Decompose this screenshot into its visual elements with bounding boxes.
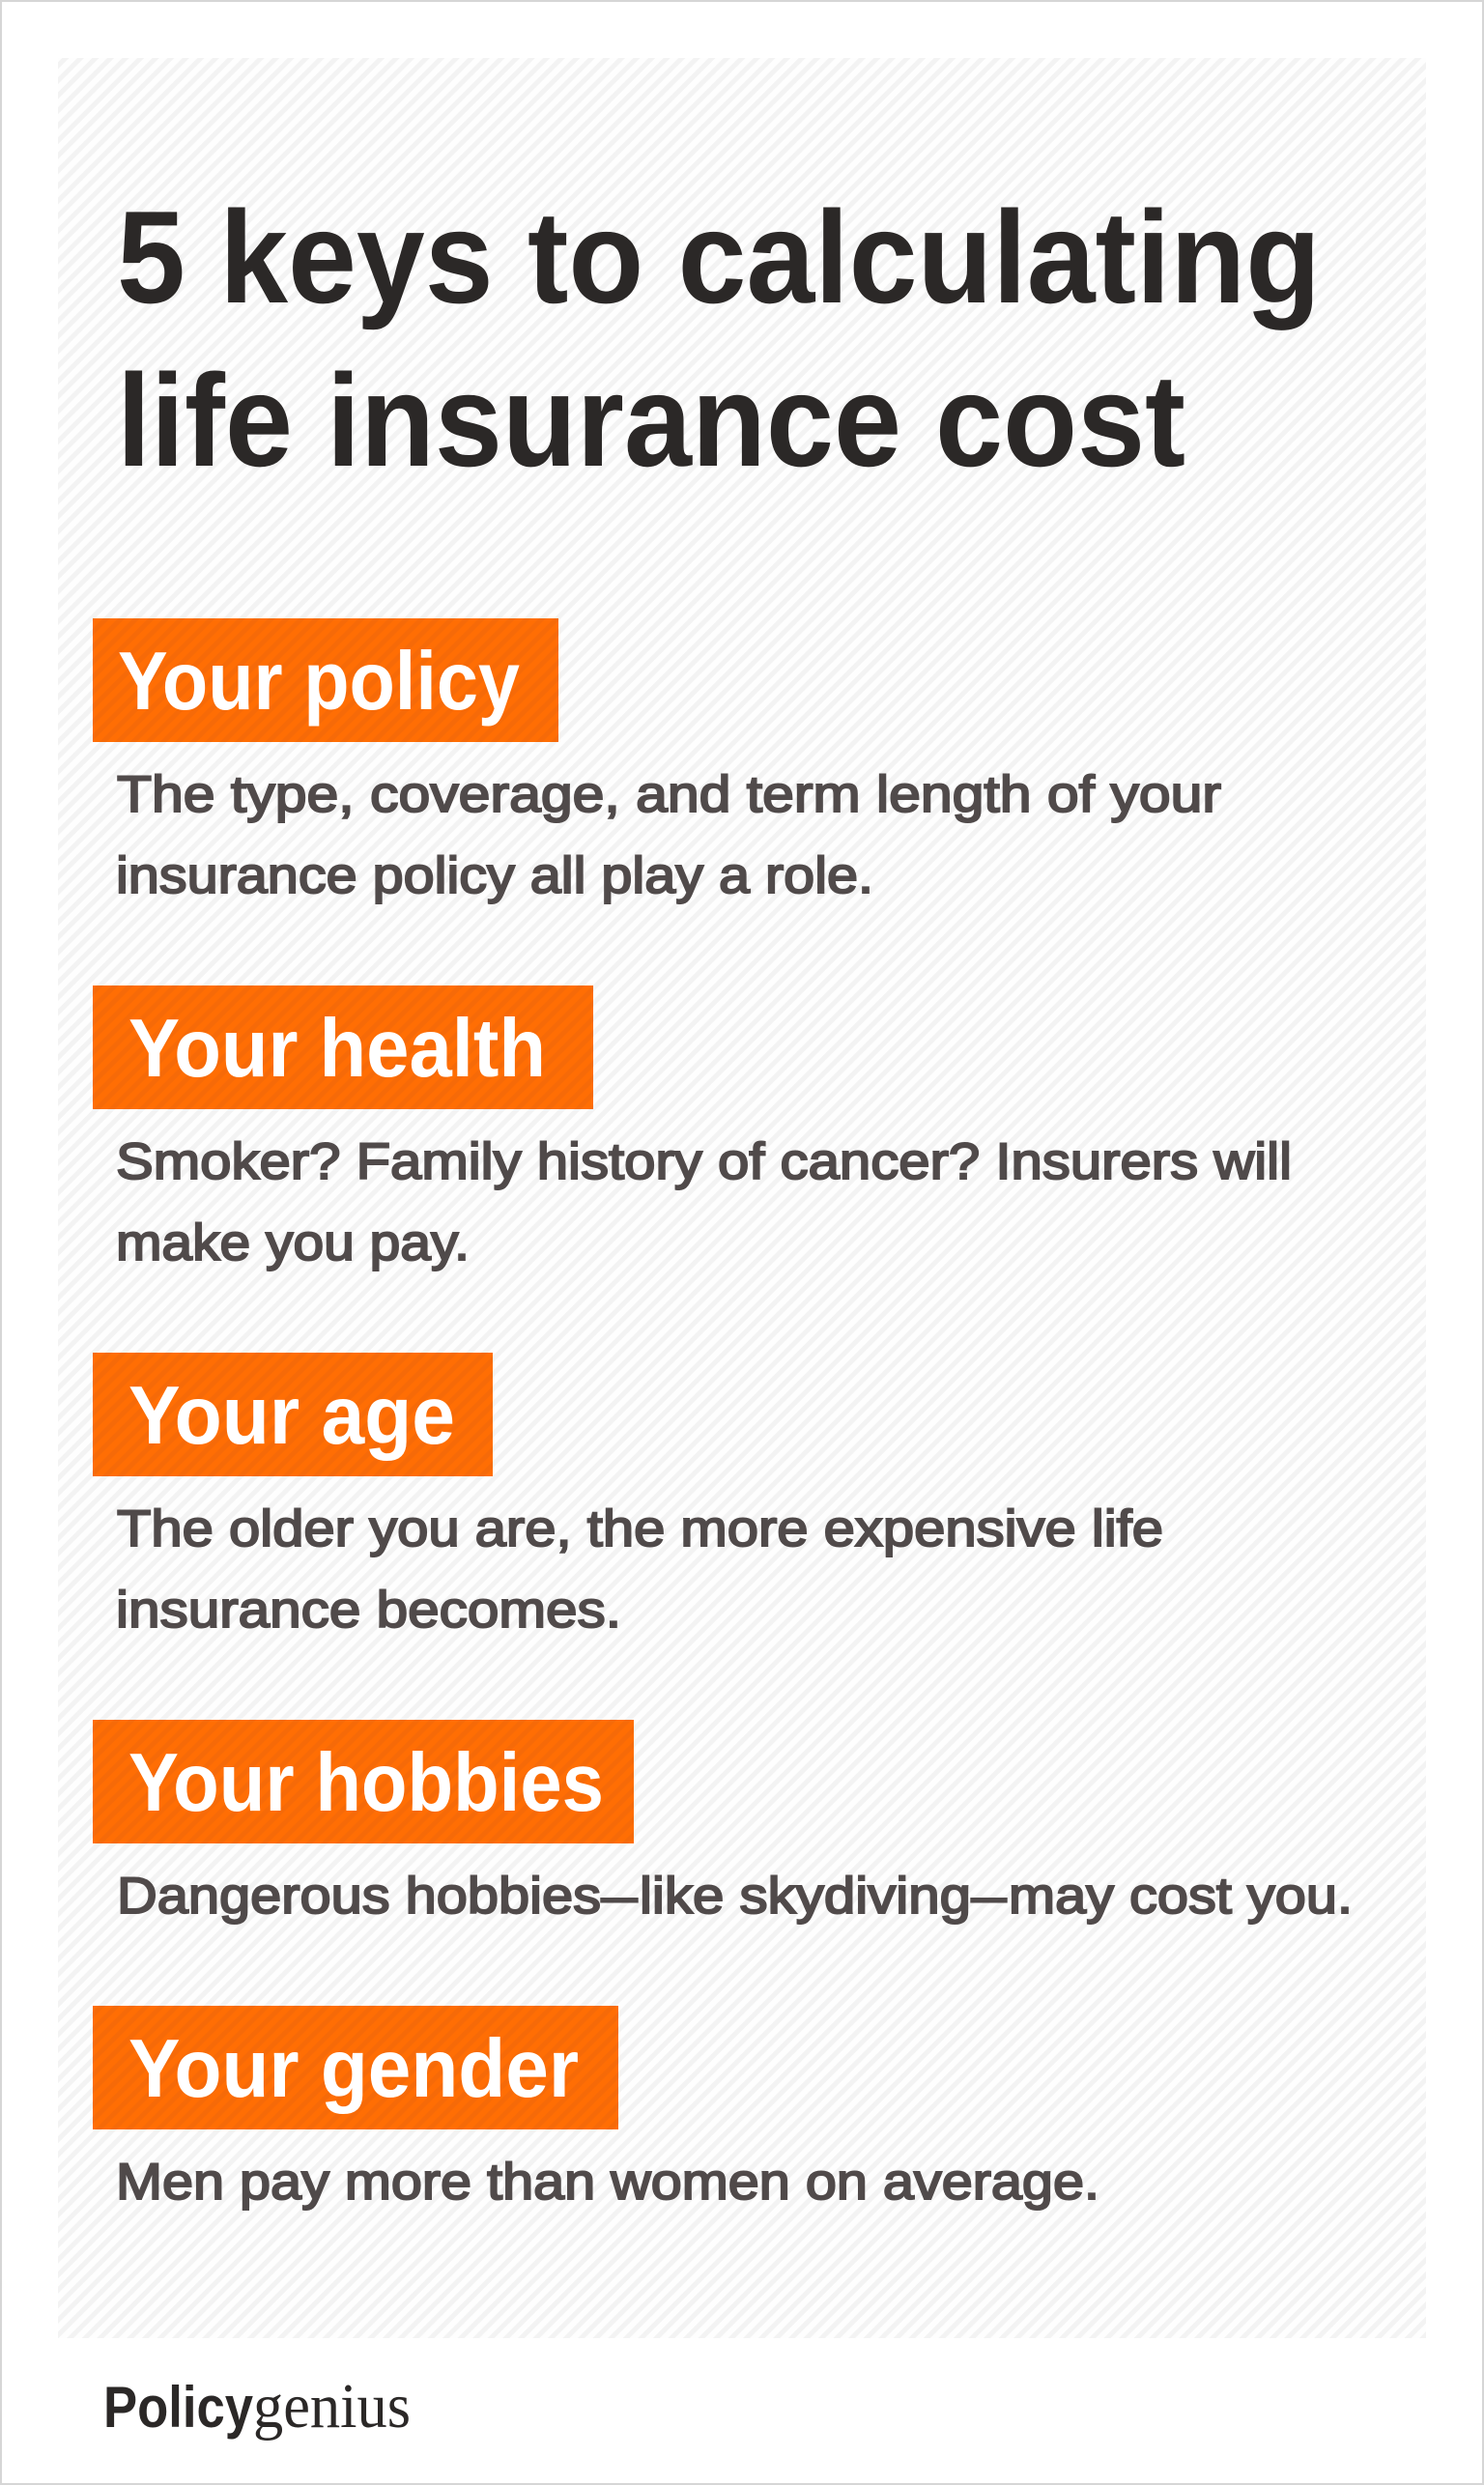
logo: Policygenius: Policy bbox=[103, 2375, 254, 2440]
text: your health description: make you pay. bbox=[116, 1214, 470, 1271]
text: your policy description: insurance policy all play a role. bbox=[116, 847, 873, 904]
heading: your age: Your age bbox=[128, 1370, 455, 1462]
heading: your hobbies: Your hobbies bbox=[128, 1737, 604, 1829]
text: your health description bbox=[116, 1133, 1292, 1271]
section: your hobbies bbox=[93, 1720, 1353, 1925]
heading: your age bbox=[93, 1353, 493, 1476]
logo: Policygenius: genius bbox=[253, 2371, 411, 2442]
text: your health description: Smoker? Family history of cancer? Insurers will bbox=[116, 1133, 1292, 1190]
text: your age description: The older you are, the more expensive life bbox=[117, 1500, 1163, 1557]
section: your policy bbox=[93, 618, 1221, 904]
text: your hobbies description: may cost you. bbox=[1009, 1868, 1353, 1925]
text: your hobbies description: like skydiving bbox=[640, 1868, 971, 1925]
text: your age description bbox=[116, 1500, 1163, 1639]
text: your age description: insurance becomes. bbox=[116, 1582, 621, 1639]
text: your hobbies description: — bbox=[971, 1868, 1007, 1925]
section: your gender bbox=[93, 2006, 1099, 2211]
heading: your hobbies bbox=[93, 1720, 634, 1843]
text: your policy description: The type, coverage, and term length of your bbox=[117, 766, 1221, 823]
heading: your health: Your health bbox=[128, 1003, 546, 1095]
heading: your gender: Your gender bbox=[128, 2023, 579, 2115]
section: your age bbox=[93, 1353, 1163, 1639]
heading: your health bbox=[93, 985, 593, 1109]
text: your hobbies description: — bbox=[601, 1868, 638, 1925]
heading: your gender bbox=[93, 2006, 618, 2129]
text: your policy description bbox=[116, 766, 1221, 904]
text: your gender description: Men pay more than women on average. bbox=[116, 2154, 1099, 2211]
title bbox=[117, 184, 1321, 494]
title: 5 keys to calculating bbox=[117, 184, 1321, 330]
text: your hobbies description bbox=[117, 1868, 1353, 1925]
section: your health bbox=[93, 985, 1292, 1271]
heading: your policy: Your policy bbox=[118, 636, 520, 728]
logo: Policygenius bbox=[103, 2371, 411, 2442]
text: your hobbies description: Dangerous hobbies bbox=[117, 1868, 601, 1925]
title: life insurance cost bbox=[117, 347, 1185, 494]
